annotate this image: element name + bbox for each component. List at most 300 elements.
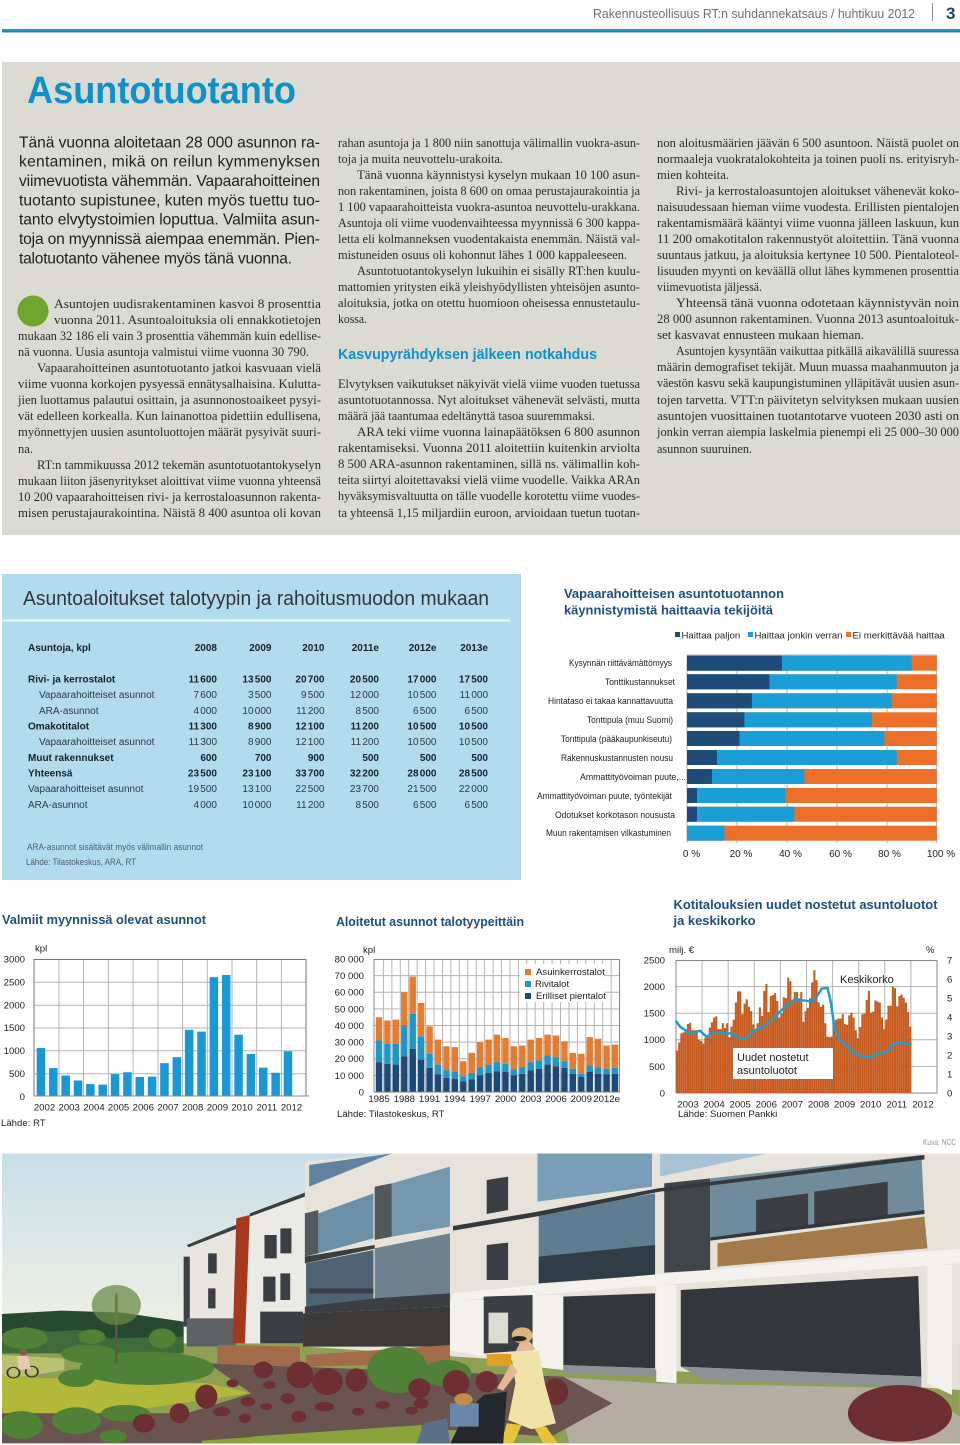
body text column 2 [338, 136, 641, 520]
category labels: Muun rakentamisen vilkastuminen [546, 828, 671, 838]
table rows: 11 000 [460, 690, 488, 701]
axis labels: 2003 [677, 1100, 699, 1110]
axis labels: 80 000 [335, 954, 364, 966]
page header [2, 3, 960, 32]
axis labels: 2006 [756, 1100, 777, 1110]
axis labels: 2003 [59, 1102, 80, 1114]
chart title [564, 586, 784, 618]
upper right balconies [538, 1153, 652, 1202]
percent axis: 0 % [683, 849, 700, 860]
garage openings [563, 1276, 921, 1377]
table rows: 10 500 [407, 690, 437, 701]
table rows: 8 500 [355, 706, 379, 717]
lede text block: toja on myynnissä aiempaa enemmän. Pien- [19, 231, 320, 248]
panel: article background [2, 62, 960, 535]
photo: apartment building with woman and stroller [0, 1153, 960, 1444]
body text column 2: non rakentaminen, joista 8 600 on omaa perustajaurakointia ja [338, 184, 640, 198]
axis labels: 1985 [368, 1094, 390, 1105]
lawn [2, 1377, 251, 1413]
axis labels: 2 [947, 1050, 952, 1062]
table notes [26, 842, 203, 867]
table rows: 10 000 [242, 706, 272, 717]
axis labels: 2000 [644, 982, 665, 993]
table rows: 17 000 [407, 674, 437, 686]
body text column 3: määrin demografiset tekijät. Muun muassa maahanmuuton ja [657, 360, 959, 374]
balcony glass [309, 1153, 392, 1187]
axis labels: 2012 [281, 1102, 302, 1114]
child [450, 1403, 479, 1427]
chart: housing starts by building type [335, 914, 620, 1120]
axis labels: 2500 [644, 956, 665, 966]
table rows: ARA-asunnot [39, 706, 99, 717]
table rows: 23 700 [350, 784, 379, 795]
table rows: 12 100 [295, 737, 325, 748]
bars [687, 656, 937, 841]
panel: housing starts table [2, 574, 521, 880]
green bushes [0, 1328, 471, 1443]
young tree [92, 1285, 141, 1363]
body text column 2: ta yhteensä 1,15 miljardiin euroon, arvioidaan tuetun tuotan- [338, 506, 640, 520]
legend: Rivitalot [535, 979, 569, 990]
axis labels: 1 [947, 1070, 952, 1080]
table header row: 2012e [409, 643, 437, 654]
garden bed [122, 1363, 612, 1440]
body text column 3: lisuuden myynti on keväällä ollut lähes kymmenen prosenttia [657, 264, 959, 278]
table header row [28, 643, 488, 654]
axis labels: 4 [947, 1012, 953, 1024]
axis labels: 5 [947, 994, 952, 1004]
body text column 1: mukaan 32 186 eli vain 3 prosenttia vähemmän kuin edellise- [18, 329, 321, 343]
axis labels: Lähde: Suomen Pankki [678, 1109, 777, 1120]
body text column 3: 28 000 asunnon rakentaminen. Vuonna 2013 asuntoaloituk- [657, 312, 959, 326]
table rows: 6 500 [464, 800, 488, 811]
table rows: 10 500 [407, 737, 437, 748]
axis labels: 2010 [860, 1100, 881, 1110]
table header row: Asuntoja, kpl [28, 643, 91, 654]
axis labels: 500 [649, 1062, 665, 1073]
body text column 3: asunnon suuruinen. [657, 442, 752, 456]
axis labels: 6 [947, 974, 952, 986]
body text column 2: teita siirtyi aloitettavaksi vielä viime vuodelle. Vaikka ARAn [338, 473, 641, 487]
axis labels: 10 000 [335, 1071, 364, 1082]
body text column 3: Yhteensä tänä vuonna odotetaan käynnistyvän noin [676, 296, 960, 310]
axis labels: 3 [947, 1032, 952, 1042]
axis labels: 2012e [593, 1094, 620, 1105]
table rows: Yhteensä [28, 768, 73, 780]
table rows: 11 300 [189, 737, 217, 748]
table rows: 11 600 [188, 674, 217, 686]
axis labels: % [926, 945, 935, 956]
body text column 2: määrä jää taantumaa edeltänyttä tasoa suuremmaksi. [338, 409, 595, 423]
table rows: 4 000 [193, 706, 217, 717]
pillars [450, 1265, 952, 1395]
table rows: 8 500 [355, 800, 379, 811]
category labels: Hintataso ei takaa kannattavuutta [548, 696, 673, 706]
table rows: 12 100 [295, 722, 325, 732]
body text column 1: jien luottamus palautui osittain, ja asunnonostoaikeet pysyi- [17, 393, 321, 407]
chart title: Aloitetut asunnot talotyypeittäin [336, 914, 524, 929]
white photo masks [0, 1150, 960, 1445]
axis labels: 500 [9, 1069, 25, 1080]
chart: new housing loans and average interest [644, 897, 953, 1120]
body text column 2: Asuntotuotantokyselyn lukuihin ei sisälly RT:hen kuulu- [357, 264, 640, 278]
percent axis: 20 % [730, 849, 753, 860]
table rows: 10 500 [459, 722, 488, 732]
axis labels: 2004 [703, 1100, 725, 1110]
category labels: Kysynnän riittävämättömyys [569, 658, 672, 668]
body text column 3: jonkin verran aiempia laskelmia pienempi eli 25 000–30 000 [656, 425, 959, 439]
legend: Haittaa jonkin verran [754, 630, 842, 642]
body text column 1: vät edelleen korkealla. Kun lainanottoa pidettiin edullisena, [18, 409, 321, 423]
body text column 3: set kasvavat ennusteen mukaan hieman. [657, 328, 864, 342]
axis labels: 30 000 [335, 1038, 364, 1049]
axis labels: 2011 [256, 1102, 277, 1114]
table rows: 33 700 [295, 768, 325, 780]
table rows: ARA-asunnot [28, 800, 88, 811]
table rows: 17 500 [459, 674, 488, 686]
axis labels: 2005 [730, 1100, 751, 1110]
table rows: 500 [420, 753, 437, 764]
axis labels: 1500 [644, 1008, 665, 1020]
vertical window stripes [487, 1177, 508, 1280]
body text column 3: tojen tarvetta. VTT:n päivitetyn selvityksen mukaan uusien [657, 393, 960, 407]
axis labels: 20 000 [335, 1054, 364, 1065]
axis labels: Lähde: RT [1, 1118, 46, 1129]
body text column 1: RT:n tammikuussa 2012 tekemän asuntotuotantokyselyn [37, 458, 322, 472]
axis labels: 40 000 [335, 1021, 364, 1032]
table rows: 13 100 [242, 784, 272, 795]
grid [374, 959, 619, 1092]
body text column 1: myönnettyjen uusien asuntoluottojen määrät pysyivät suuri- [18, 425, 321, 439]
category labels: Ammattityövoiman puute,... [580, 772, 686, 782]
percent axis: 100 % [927, 849, 955, 860]
dark beams [453, 1155, 924, 1231]
axis labels: 2004 [83, 1102, 105, 1114]
chart title: Vapaarahoitteisen asuntotuotannon [564, 586, 784, 601]
axis labels: 70 000 [335, 971, 364, 982]
axis labels: 2010 [231, 1102, 253, 1114]
lede text block: talotuotanto vähenee myös tänä vuonna. [19, 250, 292, 267]
table rows: 28 000 [407, 768, 437, 780]
table rows: 11 200 [296, 800, 325, 811]
table rows: 7 600 [193, 690, 217, 701]
body text column 2: 8 500 ARA-asunnon rakentaminen, sillä ns. välimallin koh- [338, 457, 640, 471]
table rows: 32 200 [350, 768, 379, 780]
wood fence [217, 1345, 450, 1367]
body text column 3: Rivi- ja kerrostaloasuntojen aloitukset vähenevät koko- [676, 184, 959, 198]
axis labels [335, 945, 620, 1120]
body text column 1: nä vuonna. Uusia asuntoja valmistui viime vuonna 30 790. [18, 345, 309, 359]
table rows: 10 000 [242, 800, 272, 811]
axis labels: 3000 [4, 954, 25, 966]
body text column 2: letta eli kolmanneksen vuodentakaista enemmän. Näistä val- [338, 232, 640, 246]
axis labels: 0 [947, 1088, 952, 1100]
monthly loan bars [676, 970, 911, 1093]
legend [520, 964, 606, 1002]
axis labels: 0 [660, 1088, 665, 1100]
section heading: Kasvupyrähdyksen jälkeen notkahdus [338, 346, 597, 363]
body text column 3 [656, 136, 960, 456]
percent axis: 60 % [829, 849, 852, 860]
table rows: 13 500 [242, 674, 272, 686]
grid [676, 960, 937, 1093]
title: Asuntotuotanto [27, 70, 296, 112]
category labels: Tonttikustannukset [605, 677, 675, 687]
table rows: 11 300 [188, 722, 217, 732]
body text column 3: mien kohteita. [657, 168, 729, 182]
table rows: 8 900 [248, 737, 272, 748]
body text column 1: mukaan liiton jäsenyritykset aloittivat viime vuonna yhteensä [18, 474, 321, 488]
table rows: 10 500 [459, 737, 488, 748]
chart title [673, 897, 938, 928]
table rows: 28 500 [459, 768, 488, 780]
sky [2, 1153, 960, 1333]
body text column 2: 1 100 vapaarahoitteista vuokra-asuntoa neuvottelu-urakkana. [338, 200, 640, 214]
body text column 2: Elvytyksen vaikutukset näkyivät vielä viime vuoden tuetussa [338, 377, 640, 391]
table rows: 4 000 [193, 800, 217, 811]
bars: Asuinkerrostalot [376, 976, 618, 1076]
chart title: Valmiit myynnissä olevat asunnot [2, 912, 207, 927]
chart title: Kotitalouksien uudet nostetut asuntoluotot [674, 897, 938, 912]
head [512, 1327, 533, 1343]
table rows: 11 200 [350, 722, 379, 732]
building: left wing [187, 1226, 236, 1347]
table rows: 22 500 [295, 784, 325, 795]
table rows: 700 [255, 753, 272, 764]
category labels: Ammattityövoiman puute, työntekijät [537, 791, 672, 801]
body text column 2: Tänä vuonna käynnistysi kyselyn mukaan 10 100 asun- [357, 168, 640, 182]
body text column 1: na. [18, 442, 33, 456]
axis labels: 2008 [182, 1102, 203, 1114]
body text column 3: viimevuotista jäljessä. [657, 280, 762, 294]
lede text block: tanto elvytystoimien loputtua. Valmiita asun- [19, 212, 320, 229]
body text column 2: ARA teki viime vuonna lainapäätöksen 6 800 asunnon [357, 425, 641, 439]
category labels: Odotukset korkotason noususta [555, 810, 675, 820]
table rows: 500 [471, 753, 488, 764]
body text column 3: suuntaus jatkuu, ja aloituksia kertynee 10 500. Pientaloteol- [657, 248, 959, 262]
red shrubs [133, 1362, 952, 1442]
axis labels: 2500 [4, 978, 25, 988]
table rows: Vapaarahoitteiset asunnot [39, 737, 155, 748]
percent axis: 40 % [779, 849, 802, 860]
body text column 1: vuonna 2011. Asuntoaloituksia oli ennakkotietojen [54, 313, 322, 327]
table notes: ARA-asunnot sisältävät myös välimallin asunnot [27, 842, 203, 852]
body text column 3: rakentamismäärä kääntyi viime vuonna jälleen laskuun, kun [657, 216, 960, 230]
chart: hindering factors stacked bars [537, 586, 955, 860]
body text column 2: asuntotuotannossa. Nyt aloitukset vähenevät selvästi, mutta [338, 393, 640, 407]
axis labels: Lähde: Tilastokeskus, RT [337, 1109, 445, 1120]
table rows: 6 500 [464, 706, 488, 717]
table header row: 2010 [302, 643, 325, 654]
axis labels: kpl [35, 944, 47, 954]
table rows [28, 674, 488, 811]
body text column 1 [17, 297, 322, 520]
axis labels: 1988 [394, 1094, 415, 1105]
table header row: 2009 [249, 643, 272, 654]
axis labels: 2000 [4, 1000, 25, 1012]
body text column 1: 10 200 vapaarahoitteisen rivi- ja kerrostaloasunnon rakenta- [18, 490, 321, 504]
table rows: 9 500 [301, 690, 325, 701]
page header: Rakennusteollisuus RT:n suhdannekatsaus / huhtikuu 2012 [593, 7, 915, 21]
gravel driveway [551, 1377, 960, 1443]
body text column 2: rahan asuntoja ja 1 800 niin sanottuja välimallin vuokra-asun- [338, 136, 640, 150]
axis labels: milj. € [669, 945, 695, 956]
axis labels [1, 944, 302, 1129]
axis labels: 50 000 [335, 1004, 364, 1015]
table rows: 22 000 [459, 784, 488, 795]
axis labels: 1500 [4, 1023, 25, 1034]
body text column 1: Vapaarahoitteinen asuntotuotanto jatkoi kasvuaan vielä [37, 361, 321, 375]
axis labels: 2006 [133, 1102, 154, 1114]
axis labels: 1994 [444, 1094, 466, 1105]
table rows: 10 500 [407, 722, 437, 732]
axis labels: 60 000 [335, 988, 364, 999]
bars: Rivitalot [376, 1014, 618, 1081]
body text column 2: aloituksia, jotka on otettu huomioon oheisessa ennustetaulu- [338, 296, 640, 310]
axis labels: 1997 [470, 1094, 491, 1105]
body text column 3: non aloitusmäärien jäävän 6 500 asuntoon. Näistä puolet on [657, 136, 960, 150]
table notes: Lähde: Tilastokeskus, ARA, RT [26, 857, 136, 867]
body text column 2: kossa. [338, 312, 367, 326]
body text column 1: Asuntojen uudisrakentaminen kasvoi 8 prosenttia [54, 297, 321, 311]
lede text block: viimevuotista vähemmän. Vapaarahoitteinen [19, 173, 320, 190]
legs [501, 1423, 558, 1444]
cyclist [7, 1349, 38, 1378]
axis labels: 2002 [34, 1102, 55, 1114]
chart: completed homes for sale [1, 912, 309, 1129]
table rows: 20 500 [350, 674, 379, 686]
axis labels: 7 [947, 956, 952, 966]
stroller [450, 1392, 507, 1444]
table rows: Omakotitalot [28, 722, 90, 732]
chart title: käynnistymistä haittaavia tekijöitä [564, 602, 774, 618]
table rows: Vapaarahoitteiset asunnot [39, 690, 155, 701]
axis labels: kpl [363, 945, 375, 956]
callout: Uudet nostetut asuntoluotot: asuntoluotot [737, 1065, 797, 1077]
body text column 1: viime vuonna korkojen pysyessä ennätysalhaisina. Kulutta- [18, 377, 321, 391]
table rows: 900 [308, 753, 325, 764]
table title: Asuntoaloitukset talotyypin ja rahoitusmuodon mukaan [23, 588, 489, 610]
axis labels: 1000 [4, 1046, 25, 1057]
table rows: 21 500 [407, 784, 437, 795]
percent axis [683, 849, 955, 860]
building: main facade [305, 1153, 960, 1390]
page header: 3 [946, 4, 955, 23]
category labels: Rakennuskustannusten nousu [561, 753, 673, 763]
bars: Erilliset pientalot [376, 1049, 618, 1092]
axis labels: 2009 [834, 1100, 855, 1110]
body text column 2: rakentamiseksi. Vuonna 2011 aloitettiin kuitenkin arviolta [338, 441, 640, 455]
body text column 3: asuntojen vuosittainen tuotantotarve vuoteen 2030 asti on [657, 409, 960, 423]
table header row: 2011e [352, 643, 379, 654]
axis labels: 1991 [419, 1094, 440, 1105]
body text column 2: toja ja muita neuvottelu-urakoita. [338, 152, 503, 166]
callout: Keskikorko: Keskikorko [840, 974, 894, 986]
category labels: Tonttipula (pääkaupunkiseutu) [561, 734, 672, 744]
grid [687, 655, 937, 843]
table rows: 6 500 [413, 706, 437, 717]
table header row: 2008 [195, 643, 217, 654]
table rows: Vapaarahoitteiset asunnot [28, 784, 144, 795]
category labels [537, 658, 686, 838]
table rows: 12 000 [350, 690, 379, 701]
axis labels: 2003 [520, 1094, 541, 1105]
forest [2, 1311, 184, 1350]
axis labels [644, 945, 953, 1120]
axis labels: 2008 [808, 1100, 829, 1110]
legend: Haittaa paljon [682, 630, 740, 642]
axis labels: 2007 [157, 1102, 179, 1114]
woman and stroller [416, 1327, 558, 1444]
legend: Erilliset pientalot [536, 991, 606, 1002]
body text column 3: 11 200 omakotitalon rakennustyöt aloitettiin. Tänä vuonna [657, 232, 959, 246]
legend: Ei merkittävää haittaa [852, 630, 945, 642]
ground base [2, 1343, 960, 1443]
axis labels: 2009 [207, 1102, 228, 1114]
percent axis: 80 % [878, 849, 901, 860]
table rows: 6 500 [413, 800, 437, 811]
callout: Uudet nostetut asuntoluotot: Uudet nostetut [737, 1052, 809, 1064]
table rows: 11 200 [351, 737, 379, 748]
category labels: Tonttipula (muu Suomi) [587, 715, 673, 725]
icon: green circle [18, 296, 48, 326]
axis labels: 2011 [886, 1100, 907, 1110]
body text column 2: mistuneiden osuus oli kohonnut lähes 1 000 kappaleeseen. [338, 248, 627, 262]
lede text block: kentaminen, mikä on reilun kymmenyksen [19, 154, 320, 171]
lede text block: tuotanto supistunee, kuten myös tuettu tuo- [19, 192, 320, 209]
white lintel [452, 1249, 960, 1301]
body text column 2: hyväksymisvaltuutta on tälle vuodelle korotettu viime vuodes- [338, 489, 640, 503]
table rows: 500 [362, 753, 379, 764]
table rows: 19 500 [188, 784, 217, 795]
table rows: Rivi- ja kerrostalot [28, 674, 116, 686]
lede text block [19, 134, 320, 267]
axis labels: 2005 [108, 1102, 129, 1114]
bars [37, 975, 292, 1096]
lede text block: Tänä vuonna aloitetaan 28 000 asunnon ra- [19, 134, 320, 151]
axis labels: 2006 [545, 1094, 567, 1105]
legend: Asuinkerrostalot [536, 967, 605, 978]
axis labels: 2012 [912, 1100, 934, 1110]
body text column 2: Asuntoja oli viime vuodenvaihteessa myynnissä 6 300 kappa- [338, 216, 640, 230]
interest rate line [676, 988, 912, 1058]
chart title: ja keskikorko [673, 913, 756, 928]
table rows: Muut rakennukset [28, 753, 114, 764]
axis labels: 2009 [571, 1094, 592, 1105]
table rows: 20 700 [295, 674, 325, 686]
table rows: 11 200 [296, 706, 325, 717]
axis labels: 0 [20, 1092, 25, 1103]
axis labels: 2007 [782, 1100, 803, 1110]
table rows: 8 900 [248, 722, 272, 732]
axis labels: 2000 [495, 1094, 516, 1105]
table header row: 2013e [460, 643, 488, 654]
dress [508, 1351, 556, 1429]
callout: Uudet nostetut asuntoluotot [733, 1048, 833, 1079]
axis labels: 1000 [644, 1035, 665, 1046]
table rows: 3 500 [248, 690, 272, 701]
body text column 1: misen perustajaurakointina. Näistä 8 400 asuntoa oli kovan [18, 506, 322, 520]
axis labels: 0 [359, 1088, 364, 1098]
grid [34, 959, 306, 1096]
table rows: 23 500 [188, 768, 217, 780]
legend [675, 630, 945, 642]
body text column 3: naisuudessaan hieman viime vuodesta. Erillisten pientalojen [657, 200, 960, 214]
table rows: 23 100 [242, 768, 272, 780]
yellow sign [487, 1354, 511, 1366]
body text column 2: mattomien yritysten eikä yleishyödyllisten yhteisöjen asunto- [338, 280, 640, 294]
table rows: 600 [200, 753, 217, 764]
